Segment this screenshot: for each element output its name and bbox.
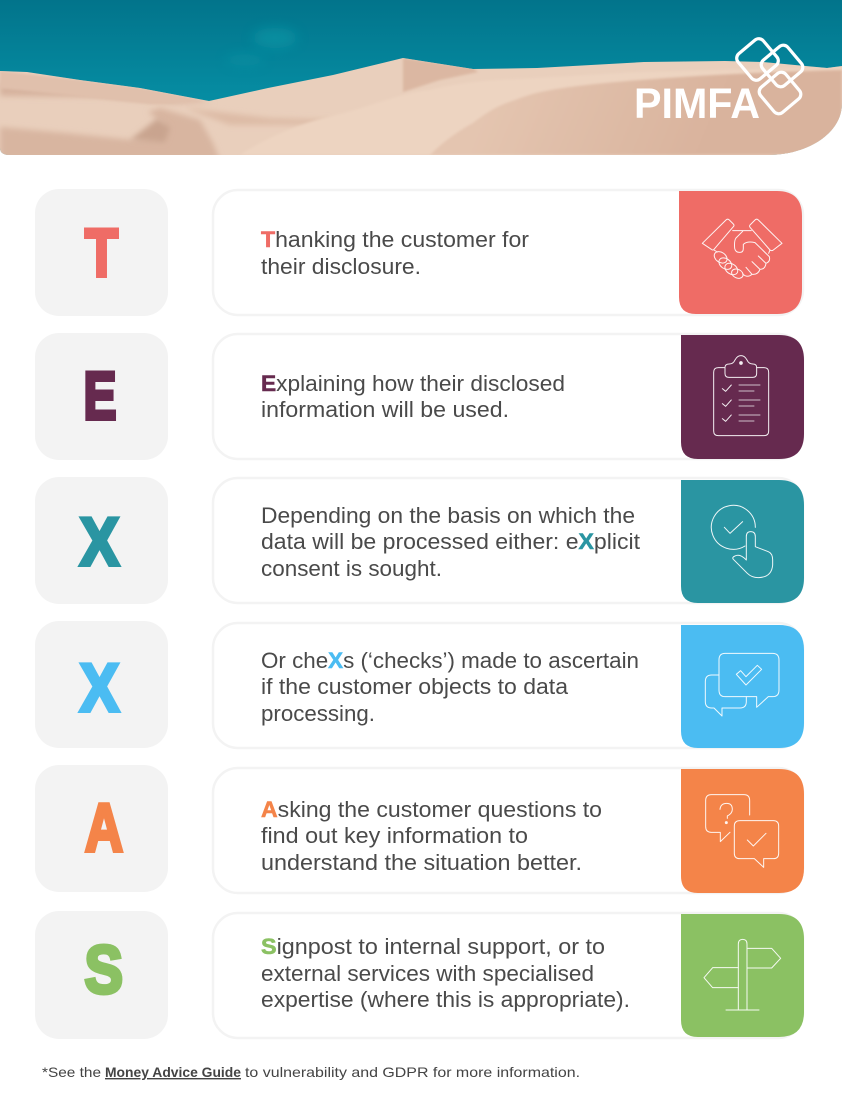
text X: Depending on the basis on which the xyxy=(261,503,635,528)
footnote xyxy=(42,1064,580,1080)
text E xyxy=(261,371,565,422)
row S: signpost xyxy=(35,911,804,1039)
colour panel X xyxy=(681,625,804,748)
text T: their disclosure. xyxy=(261,254,421,279)
text S: expertise (where this is appropriate). xyxy=(261,987,630,1012)
icon: handshake xyxy=(702,219,782,280)
letter tile E xyxy=(35,333,168,460)
footnote: to vulnerability and GDPR for more information. xyxy=(245,1064,580,1080)
footnote: Money Advice Guide xyxy=(105,1064,241,1080)
text X: if the customer objects to data xyxy=(261,674,569,699)
card E xyxy=(213,334,803,459)
logo mark: linked diamonds xyxy=(734,36,805,116)
text A xyxy=(261,797,602,875)
letter S: S xyxy=(84,932,123,1008)
colour panel E xyxy=(681,335,804,459)
card X xyxy=(213,623,803,748)
text X: processing. xyxy=(261,701,375,726)
row T: thanking xyxy=(35,189,803,316)
icon: signpost xyxy=(704,939,781,1010)
text X: Or cheXs (‘checks’) made to ascertain xyxy=(261,648,639,673)
text X: consent is sought. xyxy=(261,556,442,581)
text A: Asking the customer questions to xyxy=(261,797,602,822)
text S xyxy=(261,934,630,1012)
row X: checks xyxy=(35,621,804,748)
text A: understand the situation better. xyxy=(261,850,582,875)
icon: question and answer bubbles xyxy=(706,795,779,867)
text E: Explaining how their disclosed xyxy=(261,371,565,396)
letter T: T xyxy=(85,215,118,291)
text T: Thanking the customer for xyxy=(261,227,529,252)
letter E: E xyxy=(84,358,116,434)
letter tile T xyxy=(35,189,168,316)
logo wordmark: PIMFA xyxy=(634,80,760,128)
card X xyxy=(213,478,803,603)
text T xyxy=(261,227,529,279)
icon: speech bubbles with check xyxy=(705,653,779,716)
colour panel T xyxy=(679,191,802,314)
text S: Signpost to internal support, or to xyxy=(261,934,605,959)
text X: data will be processed either: e Xplicit xyxy=(261,529,640,554)
text E: information will be used. xyxy=(261,397,509,422)
card T xyxy=(213,190,803,315)
card S xyxy=(213,913,803,1038)
header photo: desert dunes xyxy=(0,0,842,160)
colour panel X xyxy=(681,480,804,603)
text X xyxy=(261,503,640,581)
row A: asking xyxy=(35,765,804,893)
letter X: X xyxy=(80,504,119,580)
letter tile A xyxy=(35,765,168,892)
letter A: A xyxy=(85,790,123,866)
letter tile X xyxy=(35,621,168,748)
colour panel S xyxy=(681,914,804,1037)
card A xyxy=(213,768,803,893)
footnote: *See the xyxy=(42,1064,101,1080)
row E: explaining xyxy=(35,333,804,460)
colour panel A xyxy=(681,769,804,893)
text X xyxy=(261,648,639,726)
letter tile S xyxy=(35,911,168,1039)
letter tile X xyxy=(35,477,168,604)
row X: explicit consent xyxy=(35,477,804,604)
letter X: X xyxy=(80,650,119,726)
text A: find out key information to xyxy=(261,823,528,848)
icon: clipboard checklist xyxy=(714,356,769,436)
logo: PIMFA xyxy=(634,36,805,128)
icon: finger tapping check xyxy=(711,505,773,578)
text S: external services with specialised xyxy=(261,961,594,986)
